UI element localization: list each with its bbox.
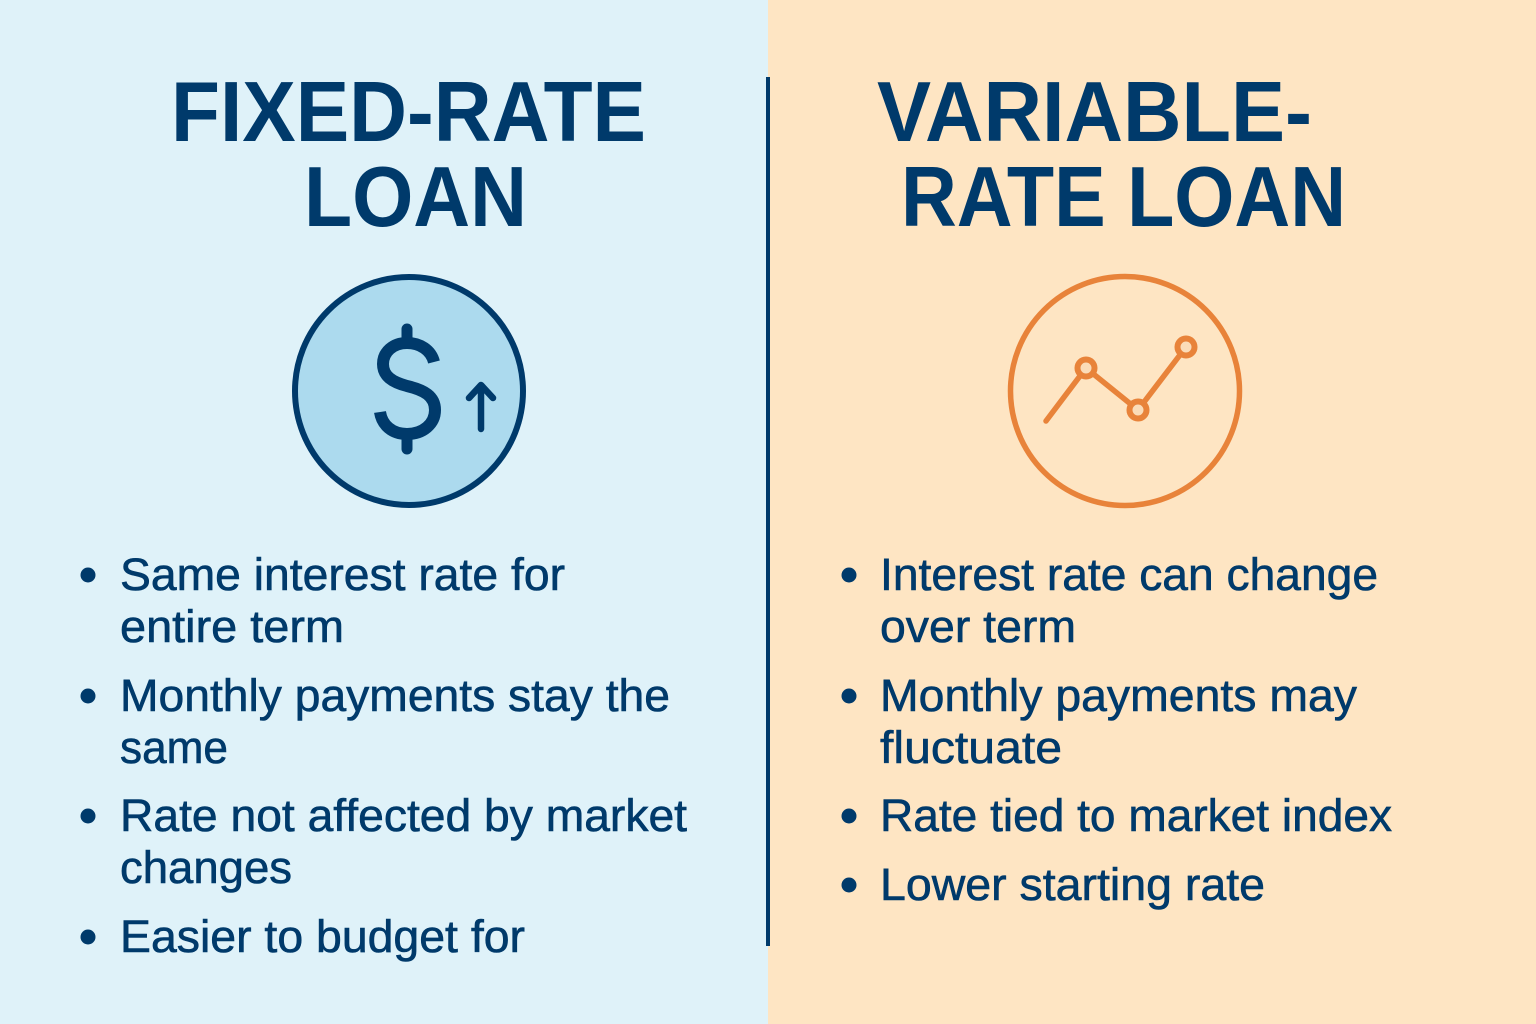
heading: variable-rate loan — [877, 65, 1346, 245]
bullet: rate tied to market index: Rate tied to market index — [880, 790, 1392, 841]
bullet: lower starting rate: Lower starting rate — [880, 859, 1265, 910]
heading: variable-rate loan: RATE LOAN — [901, 150, 1346, 245]
heading: fixed-rate loan: FIXED-RATE — [171, 65, 646, 160]
heading: fixed-rate loan — [171, 65, 646, 245]
bullet: interest rate can change: over term — [880, 601, 1076, 652]
bullet: monthly payments stay the same: same — [120, 722, 228, 773]
panel: variable-rate loan — [768, 0, 1536, 1024]
bullet: rate not affected by market — [80, 790, 688, 893]
bullet list: fixed-rate features — [80, 549, 688, 962]
heading: variable-rate loan: VARIABLE- — [877, 65, 1312, 160]
bullet: same interest rate: entire term — [120, 601, 344, 652]
bullet: monthly payments stay the same: Monthly payments stay the — [120, 670, 670, 721]
bullet: easier to budget: Easier to budget for — [120, 911, 525, 962]
panel: fixed-rate loan — [0, 0, 768, 1024]
bullet: monthly payments may fluctuate — [842, 670, 1358, 773]
bullet list: variable-rate features — [842, 549, 1392, 910]
center divider — [766, 77, 770, 946]
icon: line chart in circle — [1010, 276, 1240, 506]
heading: fixed-rate loan: LOAN — [304, 150, 527, 245]
bullet: same interest rate — [80, 549, 565, 652]
bullet: rate not affected by market: changes — [120, 842, 292, 893]
bullet: monthly payments may fluctuate: fluctuate — [880, 722, 1062, 773]
bullet: rate not affected by market: Rate not affected by market — [120, 790, 688, 841]
bullet: monthly payments stay the same — [80, 670, 670, 773]
bullet: same interest rate: Same interest rate for — [120, 549, 565, 600]
bullet: monthly payments may fluctuate: Monthly payments may — [880, 670, 1358, 721]
bullet: interest rate can change — [842, 549, 1378, 652]
icon: dollar sign with up arrow — [295, 277, 523, 505]
bullet: interest rate can change: Interest rate can change — [880, 549, 1378, 600]
